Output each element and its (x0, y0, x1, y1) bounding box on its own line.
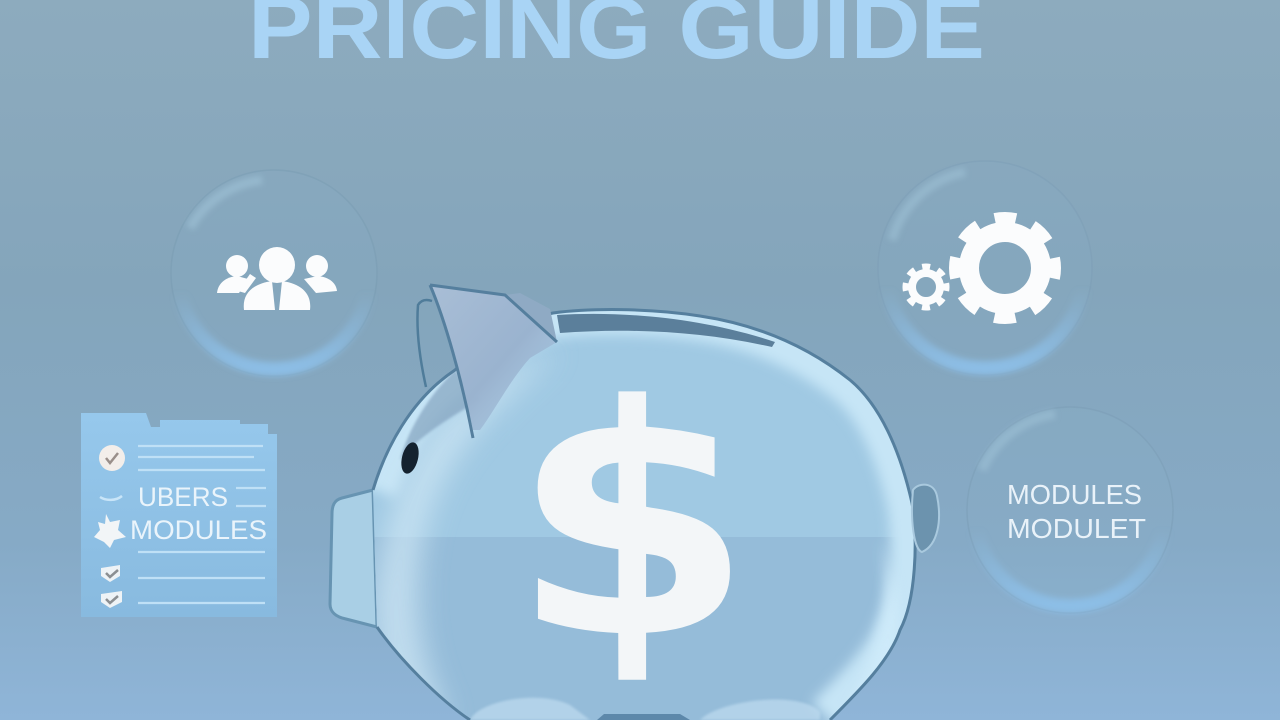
feet (470, 698, 820, 720)
checklist document (81, 413, 277, 617)
bubble text: MODULES (1007, 479, 1142, 510)
coin slot (557, 314, 775, 347)
icon: small gear (906, 266, 946, 308)
bubble text: MODULET (1007, 513, 1146, 544)
tail (912, 485, 939, 552)
icon: group of users (217, 247, 337, 310)
icon bubble: gears (878, 161, 1092, 375)
flower mark (94, 514, 126, 548)
document text: UBERS (138, 482, 228, 512)
eye (398, 441, 422, 475)
body outline (373, 310, 915, 720)
ear (430, 285, 557, 430)
document text: MODULES (130, 515, 267, 545)
body (360, 300, 930, 720)
checklist lines (138, 446, 266, 603)
feet shadow (597, 714, 690, 720)
snout (330, 490, 377, 627)
document text (130, 482, 267, 545)
check marks (99, 445, 125, 608)
icon: large gear (958, 221, 1052, 315)
bubble text (1007, 479, 1146, 544)
piggy bank (330, 285, 939, 720)
dollar sign: $ (510, 338, 754, 708)
icon bubble: users (171, 170, 377, 376)
ear back (417, 300, 432, 387)
bubble: modules (967, 407, 1173, 613)
